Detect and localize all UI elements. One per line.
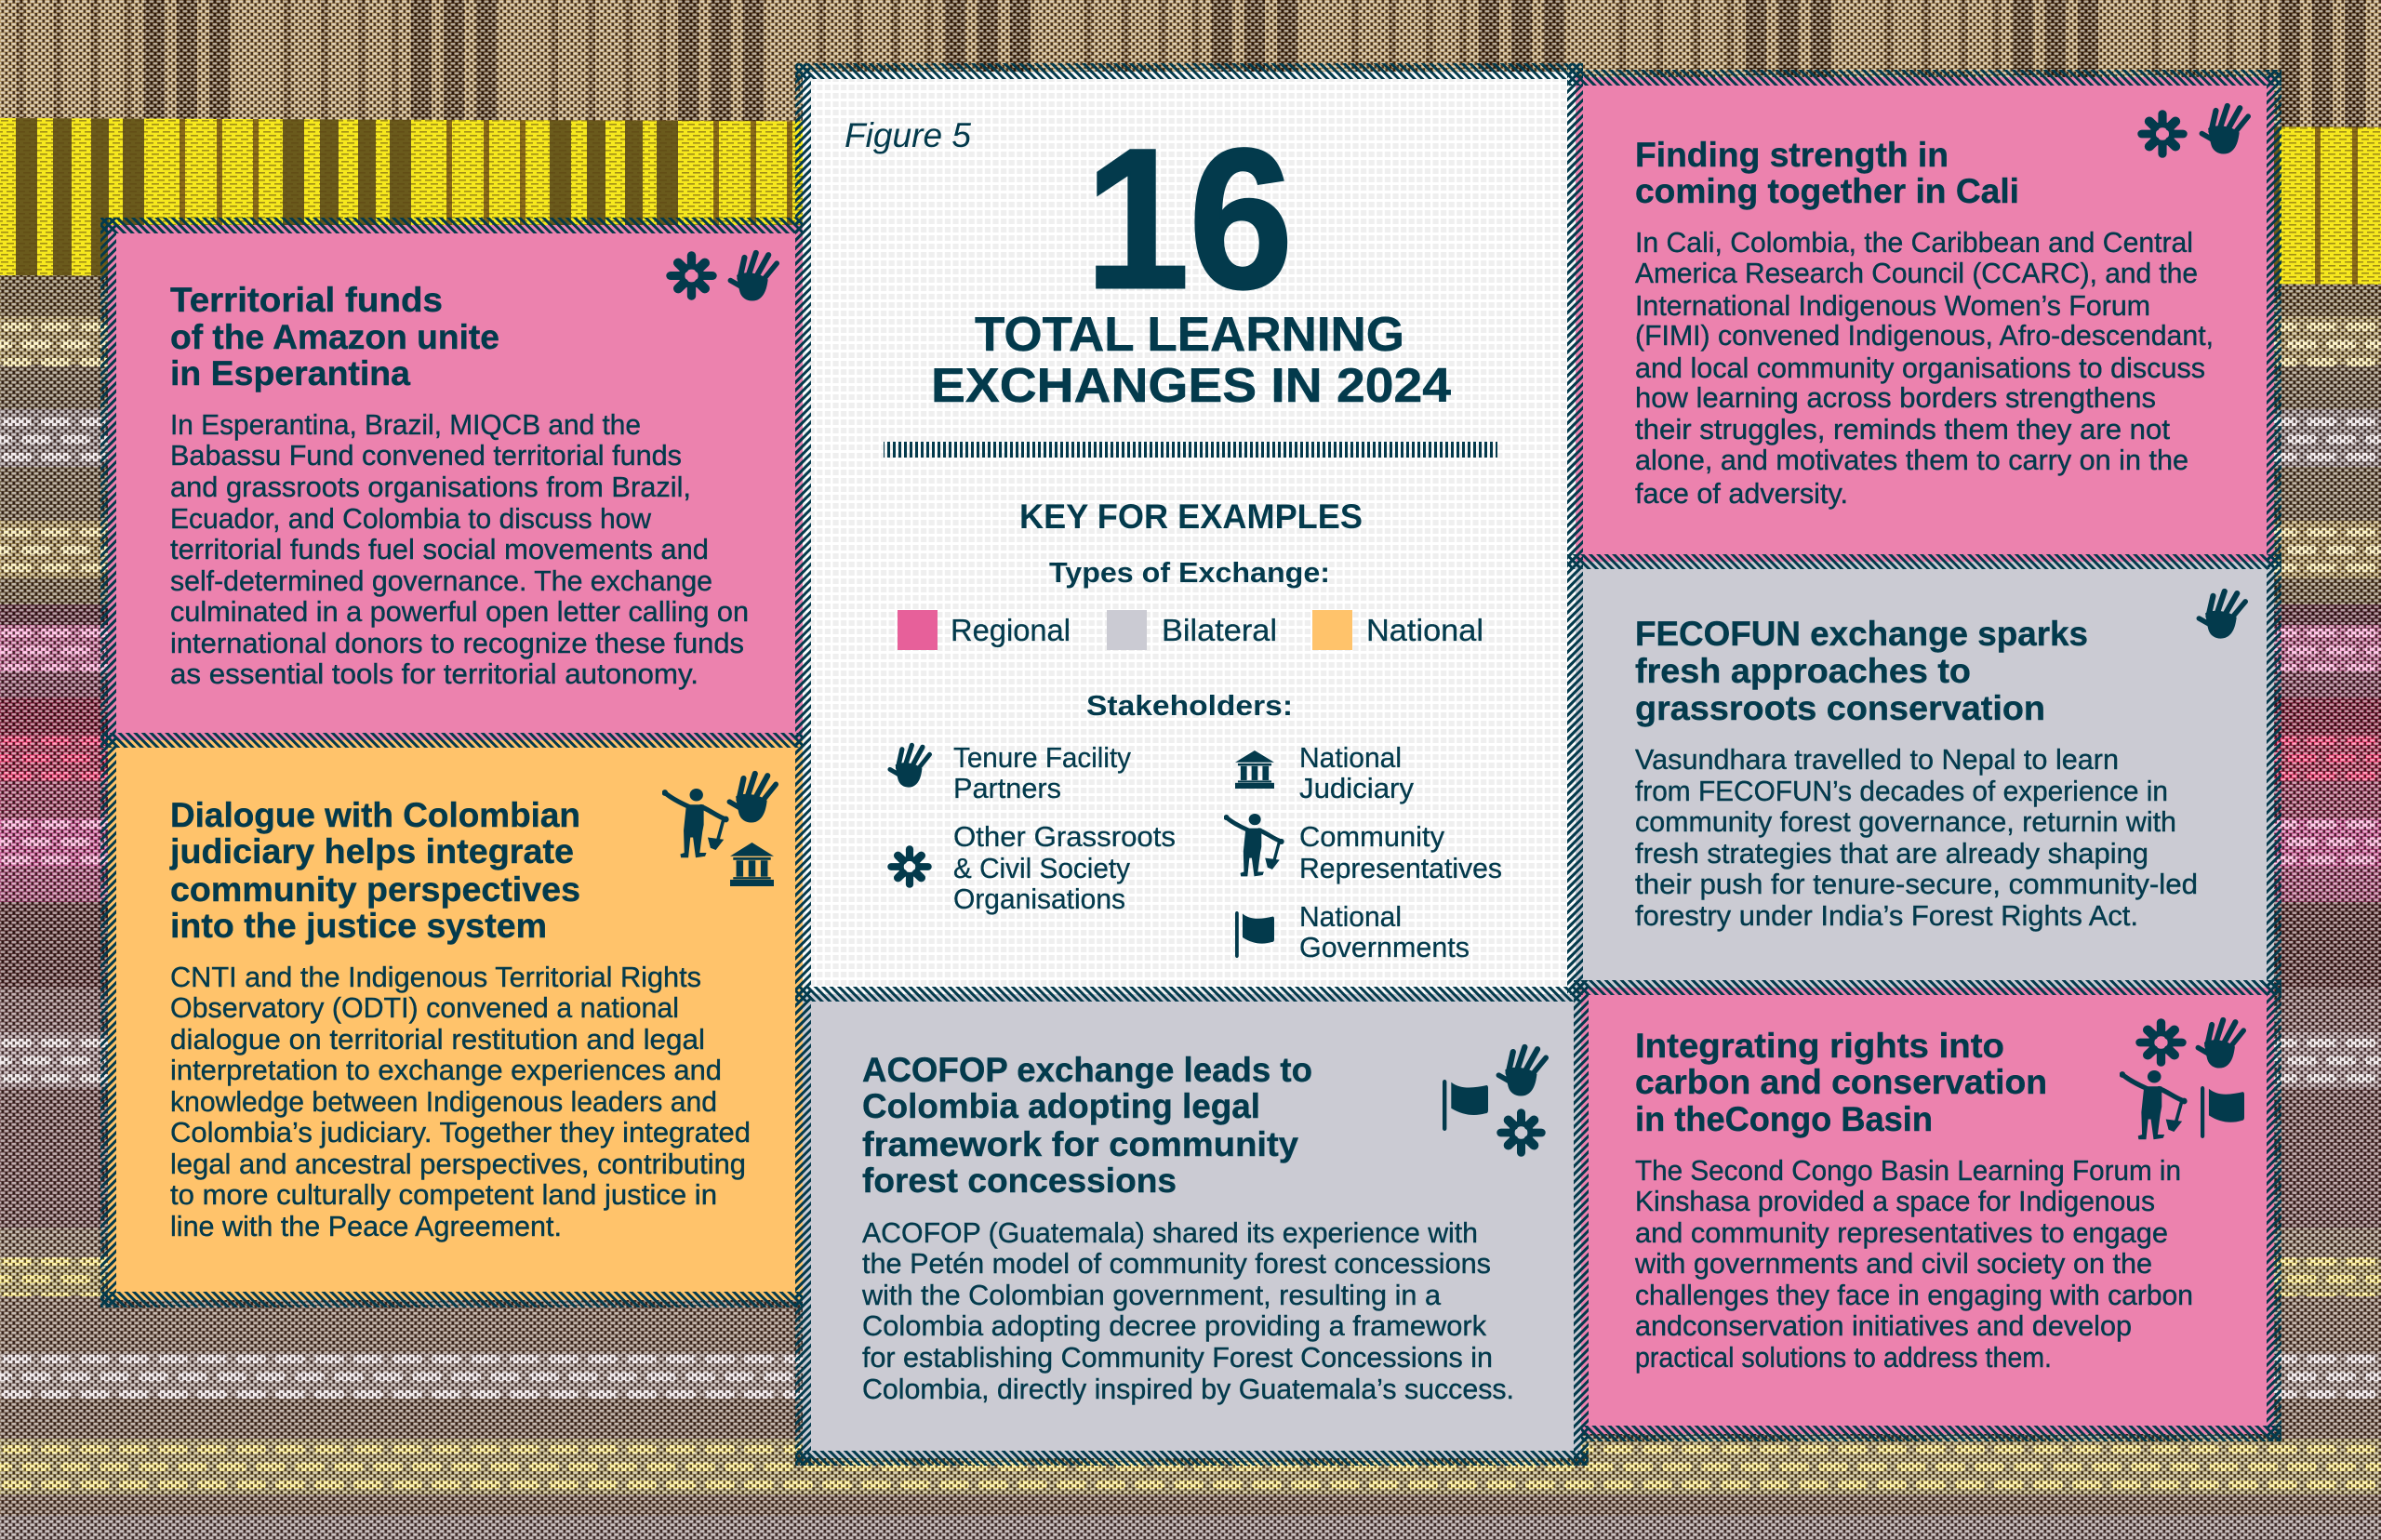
legend: national judiciary: National	[1299, 741, 1402, 774]
body text	[1635, 743, 2198, 932]
heading: ACOFOP exchange leads to	[862, 1051, 1312, 1089]
icon: hand	[729, 774, 776, 823]
heading	[1635, 136, 2019, 210]
body text: and local community organisations to discuss	[1635, 352, 2205, 384]
body text: The Second Congo Basin Learning Forum in	[1635, 1154, 2181, 1187]
legend: community representatives: Community	[1299, 820, 1444, 853]
panel: FECOFUN exchange	[1567, 554, 2281, 995]
legend: tenure facility partners	[890, 741, 1131, 804]
icon: community representative	[662, 789, 729, 857]
body text: dialogue on territorial restitution and legal	[170, 1023, 705, 1055]
legend: types of exchange	[898, 610, 1483, 650]
heading: Colombia adopting legal	[862, 1087, 1260, 1125]
body text: Vasundhara travelled to Nepal to learn	[1635, 743, 2119, 776]
body text: community forest governance, returnin with	[1635, 805, 2176, 838]
panel: Dialogue with Colombian judiciary	[100, 733, 811, 1308]
legend: types of exchange: Regional	[951, 613, 1071, 647]
body text: self-determined governance. The exchange	[170, 564, 712, 597]
icon: courthouse	[730, 843, 774, 886]
heading	[169, 796, 580, 945]
heading: judiciary helps integrate	[169, 832, 574, 870]
stakeholders heading: Stakeholders:	[1086, 689, 1293, 722]
body text: In Cali, Colombia, the Caribbean and Central	[1635, 226, 2193, 259]
body text: as essential tools for territorial autonomy.	[170, 657, 698, 690]
body text: Observatory (ODTI) convened a national	[170, 991, 679, 1024]
body text: culminated in a powerful open letter calling on	[170, 595, 749, 628]
body text: (FIMI) convened Indigenous, Afro-descendant,	[1635, 319, 2214, 352]
types of exchange heading: Types of Exchange:	[1049, 556, 1330, 589]
icon: flower	[2140, 1023, 2182, 1062]
body text: legal and ancestral perspectives, contributing	[170, 1148, 746, 1180]
heading: coming together in Cali	[1635, 172, 2019, 210]
body text: alone, and motivates them to carry on in the	[1635, 444, 2188, 476]
legend: community representatives	[1224, 814, 1502, 884]
body text	[170, 408, 749, 690]
icon: flower	[1501, 1113, 1541, 1152]
heading	[170, 281, 499, 392]
body text: and grassroots organisations from Brazil,	[170, 471, 691, 503]
body text: how learning across borders strengthens	[1635, 381, 2156, 414]
heading: carbon and conservation	[1635, 1063, 2047, 1101]
heading	[1635, 615, 2088, 727]
icon: flag	[2201, 1086, 2244, 1138]
body text: from FECOFUN’s decades of experience in	[1635, 775, 2168, 807]
panel: ACOFOP exchange	[795, 987, 1589, 1466]
icon: hand	[730, 253, 777, 301]
body text: In Esperantina, Brazil, MIQCB and the	[170, 408, 641, 441]
figure label: Figure 5	[845, 116, 971, 154]
body text: forestry under India’s Forest Rights Act.	[1635, 899, 2138, 932]
heading: forest concessions	[862, 1162, 1177, 1200]
body text	[170, 961, 751, 1242]
body text: Colombia’s judiciary. Together they integrated	[170, 1116, 751, 1148]
heading: fresh approaches to	[1635, 652, 1971, 690]
heading: framework for community	[862, 1125, 1298, 1163]
body text: fresh strategies that are already shaping	[1635, 837, 2148, 870]
body text: America Research Council (CCARC), and the	[1635, 257, 2198, 289]
body text: with the Colombian government, resulting in a	[861, 1279, 1442, 1311]
body text: Kinshasa provided a space for Indigenous	[1635, 1185, 2155, 1217]
big number: 16	[1085, 108, 1293, 330]
heading: in theCongo Basin	[1635, 1100, 1933, 1138]
icon: hand	[2201, 106, 2248, 154]
body text: ACOFOP (Guatemala) shared its experience with	[862, 1216, 1478, 1249]
legend: types of exchange: National	[1366, 613, 1483, 647]
body text: practical solutions to address them.	[1635, 1341, 2052, 1374]
heading: into the justice system	[170, 907, 547, 945]
icon: community representative	[2120, 1070, 2188, 1139]
panel: headline and key	[795, 63, 1583, 1002]
legend: national judiciary	[1235, 741, 1414, 804]
icon: hand	[2198, 1020, 2243, 1069]
legend: national governments	[1235, 900, 1470, 963]
body text: their push for tenure-secure, community-led	[1635, 868, 2198, 900]
icon: flag	[1443, 1080, 1488, 1131]
legend: community representatives: Representatives	[1299, 852, 1502, 884]
icon: hand	[2199, 591, 2245, 639]
heading: Integrating rights into	[1635, 1027, 2004, 1065]
body text: knowledge between Indigenous leaders and	[170, 1085, 717, 1118]
body text	[1634, 1154, 2193, 1374]
body text: their struggles, reminds them they are not	[1635, 413, 2170, 445]
icon: flower	[671, 256, 712, 296]
legend: tenure facility partners: Partners	[953, 772, 1061, 804]
body text: challenges they face in engaging with carbon	[1635, 1279, 2193, 1311]
legend: other grassroots	[891, 820, 1176, 915]
body text: interpretation to exchange experiences and	[170, 1054, 722, 1086]
heading: Finding strength in	[1635, 136, 1949, 174]
heading: in Esperantina	[170, 354, 410, 392]
body text: and community representatives to engage	[1635, 1216, 2168, 1249]
body text: territorial funds fuel social movements and	[170, 533, 709, 565]
legend: other grassroots: Organisations	[953, 883, 1125, 915]
panel: Finding strength in Cali	[1567, 70, 2281, 569]
body text: Ecuador, and Colombia to discuss how	[170, 502, 652, 535]
body text: Colombia, directly inspired by Guatemala’s success.	[862, 1373, 1514, 1405]
heading: grassroots conservation	[1635, 689, 2045, 727]
heading: of the Amazon unite	[170, 318, 499, 356]
legend: other grassroots: Other Grassroots	[953, 820, 1176, 853]
body text: International Indigenous Women’s Forum	[1635, 289, 2150, 322]
heading: FECOFUN exchange sparks	[1635, 615, 2088, 653]
heading: Territorial funds	[170, 281, 443, 319]
legend: tenure facility partners: Tenure Facility	[953, 741, 1131, 774]
key heading: KEY FOR EXAMPLES	[1019, 498, 1363, 536]
heading: community perspectives	[170, 870, 580, 909]
legend: types of exchange: Bilateral	[1162, 613, 1277, 647]
body text: Colombia adopting decree providing a framework	[862, 1309, 1486, 1342]
heading	[1635, 1027, 2047, 1138]
heading	[862, 1051, 1312, 1200]
body text: Babassu Fund convened territorial funds	[170, 439, 682, 471]
body text: line with the Peace Agreement.	[170, 1210, 562, 1242]
body text: international donors to recognize these funds	[170, 627, 744, 659]
body text: andconservation initiatives and develop	[1635, 1309, 2132, 1342]
body text: to more culturally competent land justice in	[170, 1178, 717, 1211]
body text: face of adversity.	[1635, 477, 1848, 510]
legend: national judiciary: Judiciary	[1299, 772, 1414, 804]
body text: for establishing Community Forest Concessions in	[862, 1341, 1493, 1374]
body text	[861, 1216, 1514, 1405]
panel: Territorial funds of the Amazon	[100, 218, 811, 748]
headline: EXCHANGES IN 2024	[931, 359, 1451, 413]
panel: Integrating rights into carbon and conservation	[1574, 980, 2281, 1441]
legend: other grassroots: & Civil Society	[953, 852, 1130, 884]
headline	[931, 308, 1451, 413]
legend: national governments: National	[1299, 900, 1402, 933]
icon: flower	[2142, 114, 2183, 153]
icon: hand	[1498, 1047, 1546, 1096]
body text	[1635, 226, 2214, 510]
legend: national governments: Governments	[1299, 931, 1470, 963]
headline: TOTAL LEARNING	[975, 308, 1404, 362]
heading: Dialogue with Colombian	[170, 796, 580, 834]
body text: with governments and civil society on the	[1634, 1247, 2152, 1280]
body text: CNTI and the Indigenous Territorial Rights	[170, 961, 701, 993]
body text: the Petén model of community forest concessions	[862, 1247, 1491, 1280]
